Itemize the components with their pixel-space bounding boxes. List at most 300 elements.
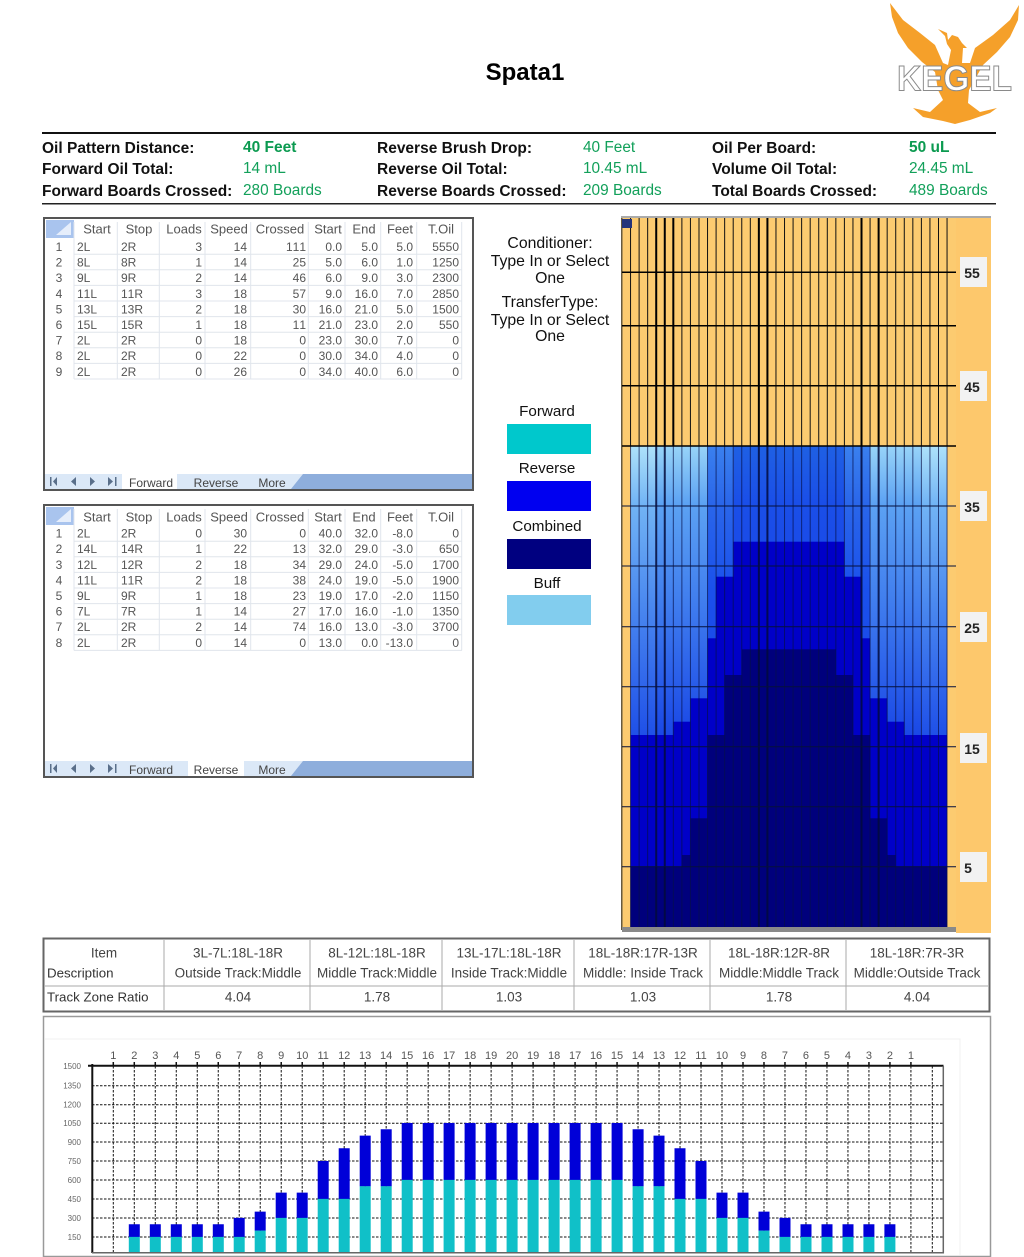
forward table rows: 2R [121,334,137,348]
reverse table rows: 2 [195,573,202,587]
x axis board labels: 19 [527,1050,539,1062]
reverse stats: Reverse Brush Drop: [377,140,532,157]
reverse stats: Reverse Oil Total: [377,161,508,178]
reverse stats [377,139,662,200]
forward table rows: 9R [121,271,137,285]
reverse table header: End [352,510,376,524]
forward table rows: 7.0 [396,334,413,348]
legend: combined: Combined [512,518,582,535]
reverse table rows: 24.0 [319,573,342,587]
forward table rows: 2R [121,365,137,379]
forward table rows: 2L [77,365,91,379]
distance scale labels: 55 [964,265,980,281]
reverse table rows: 1700 [432,558,459,572]
row descriptions: 18L-18R:12R-8R [728,946,830,960]
reverse table rows: -3.0 [392,542,413,556]
forward table rows: 6.0 [361,256,378,270]
reverse table rows: 18 [234,573,247,587]
reverse bars [129,1123,895,1237]
forward table rows: 23.0 [355,318,378,332]
reverse table rows: 2 [195,620,202,634]
forward table rows: 23.0 [319,334,342,348]
forward table rows: 9.0 [325,287,342,301]
conditioner text: One [535,270,565,287]
ratio values: 1.78 [364,990,390,1004]
row descriptions: Outside Track:Middle [175,966,301,980]
reverse-over-forward oil layers [631,542,947,927]
reverse table rows: 14 [234,636,247,650]
reverse stats: 209 Boards [583,182,662,199]
row descriptions: Middle:Middle Track [719,966,839,980]
reverse table rows: 2 [56,542,63,556]
reverse table tab bar [45,761,472,777]
reverse table rows: 23 [293,589,306,603]
x axis board labels: 14 [632,1050,644,1062]
chart grid [92,1066,943,1253]
reverse table rows: 4 [56,573,63,587]
forward table rows: 5.0 [396,302,413,316]
reverse table rows: 19.0 [319,589,342,603]
forward table rows: 5 [56,302,63,316]
x axis board labels: 9 [278,1050,284,1062]
x axis board labels: 16 [422,1050,434,1062]
forward table rows: 1 [195,318,202,332]
reverse table rows: 0 [452,636,459,650]
chart axes [88,1064,944,1253]
forward table rows: 0.0 [325,240,342,254]
top axis ticks [113,1062,911,1066]
reverse table rows: -13.0 [386,636,413,650]
x axis board labels: 7 [236,1050,242,1062]
reverse table rows: 8 [56,636,63,650]
row descriptions: Item [91,946,117,960]
distance scale labels: 15 [964,741,980,757]
forward table rows: 14 [234,271,247,285]
x axis board labels: 4 [845,1050,851,1062]
forward table rows: 2 [195,271,202,285]
forward table rows: 16.0 [319,302,342,316]
board and distance grid [622,218,956,927]
reverse table rows: -5.0 [392,558,413,572]
reverse table rows: 0 [299,636,306,650]
reverse table rows: -3.0 [392,620,413,634]
forward table rows: 6.0 [396,365,413,379]
reverse stats: 10.45 mL [583,160,648,177]
distance scale labels: 25 [964,620,980,636]
forward table rows: 6.0 [325,271,342,285]
forward table header: Crossed [256,222,304,236]
x axis board labels: 2 [131,1050,137,1062]
forward table rows: 18 [234,302,247,316]
x axis board labels: 15 [611,1050,623,1062]
forward table rows: 18 [234,334,247,348]
reverse table header: Feet [387,510,413,524]
forward table rows: 1500 [432,302,459,316]
reverse table rows: 2R [121,620,137,634]
forward table rows: 2L [77,240,91,254]
forward table rows: 0 [195,365,202,379]
forward table rows: 550 [439,318,459,332]
reverse table rows: 13.0 [319,636,342,650]
forward table rows: 1.0 [396,256,413,270]
row descriptions [47,946,981,980]
reverse table rows: 9L [77,589,91,603]
ratio values: 4.04 [225,990,252,1004]
forward table rows: 2L [77,334,91,348]
reverse table header [83,510,454,524]
x axis board labels: 11 [317,1050,329,1062]
forward table rows: 0 [299,365,306,379]
reverse table rows [56,527,459,650]
reverse table rows: 2L [77,636,91,650]
reverse table rows: 2L [77,527,91,541]
forward table rows: 0 [195,334,202,348]
row descriptions: 8L-12L:18L-18R [328,946,426,960]
forward table tab bar: Reverse [194,476,239,490]
ratio values: 4.04 [904,990,931,1004]
transfer type text [491,294,610,345]
x axis board labels: 1 [110,1050,116,1062]
y axis labels: 150 [68,1233,82,1242]
forward table rows: 34.0 [355,349,378,363]
forward table header: Start [314,222,342,236]
x axis board labels: 5 [194,1050,200,1062]
distance scale labels: 5 [964,860,972,876]
conditioner text: Conditioner: [507,235,593,252]
forward stats: 280 Boards [243,182,322,199]
reverse table rows: 2 [195,558,202,572]
x axis board labels: 6 [803,1050,809,1062]
reverse table rows: 13.0 [355,620,378,634]
reverse table rows: 650 [439,542,459,556]
reverse table rows: 2R [121,636,137,650]
forward table header [83,222,454,236]
ratio values: Track Zone Ratio [47,990,148,1004]
ratio values: 1.03 [630,990,656,1004]
x axis board labels: 14 [380,1050,392,1062]
reverse table rows: 1 [195,542,202,556]
forward table header: Loads [166,222,202,236]
y axis labels [63,1062,82,1242]
forward table rows: 2L [77,349,91,363]
x axis board labels: 15 [401,1050,413,1062]
y axis labels: 900 [68,1138,82,1147]
corner handle [622,219,632,228]
x axis board labels: 12 [674,1050,686,1062]
x axis board labels: 16 [590,1050,602,1062]
buff gradients [631,446,947,735]
forward bars [129,1180,895,1253]
reverse table rows: 1 [195,605,202,619]
x axis board labels: 11 [695,1050,707,1062]
reverse table rows: 3 [56,558,63,572]
forward table rows: 0 [299,349,306,363]
reverse table rows: 18 [234,589,247,603]
forward table rows: 34.0 [319,365,342,379]
forward table rows: 18 [234,318,247,332]
legend: buff: Buff [534,575,561,592]
reverse table rows: 40.0 [319,527,342,541]
forward stats: Forward Oil Total: [42,161,173,178]
legend: forward: Forward [519,403,575,420]
x axis board labels: 17 [443,1050,455,1062]
forward table tab bar: Forward [129,476,173,490]
reverse table header: Speed [210,510,248,524]
reverse table rows: 1350 [432,605,459,619]
forward table rows: 46 [293,271,306,285]
reverse table rows: 19.0 [355,573,378,587]
forward table rows: 3.0 [396,271,413,285]
x axis board labels: 17 [569,1050,581,1062]
legend: reverse [507,460,591,511]
transfer type text: TransferType: [502,294,598,311]
forward table rows: 26 [234,365,247,379]
y axis labels: 450 [68,1195,82,1204]
forward table rows: 22 [234,349,247,363]
forward table rows: 57 [293,287,306,301]
reverse table header: Loads [166,510,202,524]
reverse table rows: -1.0 [392,605,413,619]
reverse table rows: 1900 [432,573,459,587]
reverse table rows: 9R [121,589,137,603]
reverse table rows: 12L [77,558,97,572]
forward table rows: 7 [56,334,63,348]
reverse table rows: 32.0 [355,527,378,541]
combined stats: Volume Oil Total: [712,161,837,178]
forward table rows: 1 [56,240,63,254]
forward stats [42,139,322,200]
forward table tab bar: More [258,476,286,490]
reverse table rows: 38 [293,573,306,587]
forward stats: 40 Feet [243,139,296,156]
forward table rows: 8R [121,256,137,270]
forward table rows: 16.0 [355,287,378,301]
forward table rows: 2R [121,349,137,363]
reverse table rows: 29.0 [319,558,342,572]
forward table rows: 4 [56,287,63,301]
track zone ratio table [44,938,990,1012]
x axis board labels: 3 [152,1050,158,1062]
transfer type text: Type In or Select [491,312,610,329]
forward table rows: 6 [56,318,63,332]
reverse table rows: 1150 [432,589,459,603]
forward table rows: 40.0 [355,365,378,379]
reverse table rows: 5 [56,589,63,603]
forward table header: Stop [126,222,152,236]
forward stats: 14 mL [243,160,286,177]
panel: reverse load table [44,505,473,777]
ratio values [47,990,931,1004]
oil pattern heat map [621,216,991,933]
forward table rows: 2R [121,240,137,254]
x axis board labels: 13 [359,1050,371,1062]
forward table rows: 8 [56,349,63,363]
reverse table rows: 0.0 [361,636,378,650]
reverse stats: Reverse Boards Crossed: [377,183,567,200]
row descriptions: Middle:Outside Track [854,966,981,980]
combined oil layers [631,649,947,927]
forward stats: Oil Pattern Distance: [42,140,194,157]
forward table header: Start [83,222,111,236]
reverse table rows: 7 [56,620,63,634]
reverse stats: 40 Feet [583,139,636,156]
reverse table rows: 0 [299,527,306,541]
row descriptions: Middle: Inside Track [583,966,703,980]
combined stats: 489 Boards [909,182,988,199]
reverse table rows: 34 [293,558,306,572]
reverse table rows: 1 [195,589,202,603]
forward table rows: 0 [452,334,459,348]
forward table rows: 4.0 [396,349,413,363]
reverse table rows: 13 [293,542,306,556]
forward table rows: 11 [293,318,306,332]
ratio values: 1.03 [496,990,522,1004]
forward table rows: 21.0 [355,302,378,316]
x axis board labels [110,1050,914,1062]
forward table rows: 1 [195,256,202,270]
x axis board labels: 7 [782,1050,788,1062]
reverse table rows: 18 [234,558,247,572]
x axis board labels: 10 [716,1050,728,1062]
ratio values: 1.78 [766,990,792,1004]
forward table rows: 3 [195,287,202,301]
reverse table rows: 11R [121,573,143,587]
legend: forward [507,403,591,454]
x axis board labels: 6 [215,1050,221,1062]
reverse table rows: -8.0 [392,527,413,541]
panel: oil per board bar chart [44,1016,990,1256]
reverse table rows: 24.0 [355,558,378,572]
reverse table rows: 7R [121,605,137,619]
forward table rows: 15L [77,318,97,332]
forward table rows: 30 [293,302,306,316]
row descriptions: 18L-18R:7R-3R [870,946,965,960]
reverse table rows: 0 [452,527,459,541]
x axis board labels: 9 [740,1050,746,1062]
forward table rows: 13L [77,302,97,316]
forward table rows: 25 [293,256,306,270]
forward table rows: 3 [195,240,202,254]
reverse table rows: 74 [293,620,306,634]
reverse table rows: 6 [56,605,63,619]
conditioner text [491,235,610,287]
x axis board labels: 5 [824,1050,830,1062]
forward table rows: 13R [121,302,143,316]
forward table rows: 111 [286,240,306,254]
reverse table rows: 14R [121,542,143,556]
summary rule: top [42,132,996,134]
forward table rows: 2 [56,256,63,270]
y axis labels: 1350 [63,1082,82,1090]
forward table rows: 2850 [432,287,459,301]
conditioner text: Type In or Select [491,253,610,270]
reverse table rows: 17.0 [319,605,342,619]
forward table rows: 8L [77,256,91,270]
forward table rows: 11R [121,287,143,301]
x axis board labels: 4 [173,1050,179,1062]
logo: Kegel phoenix: KEGEL [897,60,1012,98]
forward table rows: 15R [121,318,143,332]
reverse table rows: 16.0 [319,620,342,634]
row descriptions: Inside Track:Middle [451,966,567,980]
forward table rows: 0 [299,334,306,348]
forward table rows: 2.0 [396,318,413,332]
x axis board labels: 3 [866,1050,872,1062]
forward table rows: 30.0 [319,349,342,363]
forward table tab bar [45,474,472,490]
forward table rows: 11L [77,287,97,301]
x axis board labels: 8 [761,1050,767,1062]
reverse table tab bar: Reverse [194,763,239,777]
reverse table rows: 16.0 [355,605,378,619]
forward table rows: 5550 [432,240,459,254]
x axis board labels: 12 [338,1050,350,1062]
x axis board labels: 18 [464,1050,476,1062]
reverse table header: T.Oil [428,510,454,524]
forward table rows: 5.0 [396,240,413,254]
forward table rows: 21.0 [319,318,342,332]
forward table rows: 1250 [432,256,459,270]
x axis board labels: 1 [908,1050,914,1062]
forward table header: Speed [210,222,248,236]
x axis board labels: 18 [548,1050,560,1062]
reverse table header: Crossed [256,510,304,524]
reverse table rows: 3700 [432,620,459,634]
reverse table rows: 2R [121,527,137,541]
forward table rows: 3 [56,271,63,285]
combined stats: Total Boards Crossed: [712,183,877,200]
forward table rows: 7.0 [396,287,413,301]
summary stats [42,139,988,200]
distance scale labels: 45 [964,379,980,395]
panel: forward load table [44,218,473,490]
forward table rows: 0 [452,349,459,363]
reverse table tab bar: More [258,763,286,777]
reverse table rows: 0 [195,527,202,541]
distance scale labels [960,257,987,882]
combined stats: 24.45 mL [909,160,974,177]
forward table rows: 9.0 [361,271,378,285]
forward table header: T.Oil [428,222,454,236]
x axis board labels: 2 [887,1050,893,1062]
combined stats [712,139,988,200]
title: Spata1 [486,59,564,86]
y axis labels: 600 [68,1176,82,1185]
y axis labels: 750 [68,1157,82,1166]
x axis board labels: 13 [653,1050,665,1062]
forward table rows: 0 [452,365,459,379]
reverse table rows: -5.0 [392,573,413,587]
row descriptions: 3L-7L:18L-18R [193,946,283,960]
distance scale labels: 35 [964,499,980,515]
reverse table header: Stop [126,510,152,524]
reverse table rows: 14L [77,542,97,556]
reverse table rows: 14 [234,620,247,634]
y axis labels: 1500 [63,1062,82,1071]
reverse table rows: 30 [234,527,247,541]
forward table rows: 9L [77,271,91,285]
reverse table rows: 12R [121,558,143,572]
row descriptions: 18L-18R:17R-13R [588,946,698,960]
forward table rows: 5.0 [325,256,342,270]
forward table rows [56,240,459,379]
forward table rows: 0 [195,349,202,363]
x axis board labels: 8 [257,1050,263,1062]
reverse table rows: 2L [77,620,91,634]
forward table rows: 30.0 [355,334,378,348]
legend: buff [507,575,591,625]
reverse table header: Start [83,510,111,524]
